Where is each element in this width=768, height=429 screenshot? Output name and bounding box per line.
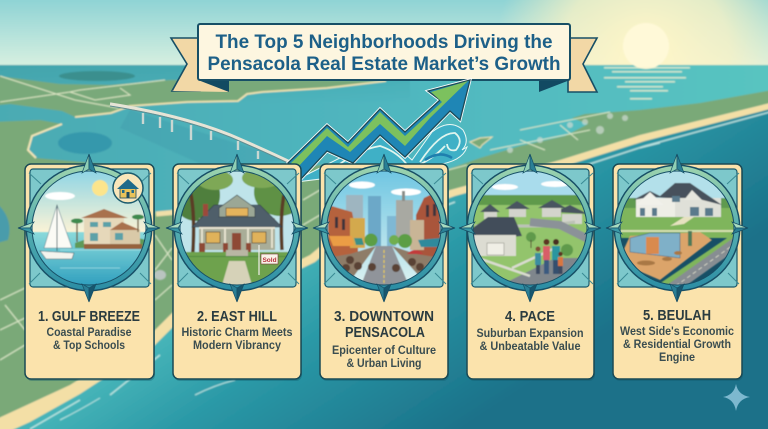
card 2 text (182, 309, 292, 352)
card 3 text: PENSACOLA (345, 325, 425, 341)
card 3: Downtown Pensacola (313, 154, 455, 381)
card 4 text: 4. PACE (505, 309, 555, 325)
card 4 text: Suburban Expansion (476, 328, 584, 340)
card 5 text: West Side's Economic (620, 326, 735, 338)
icon: school badge (113, 173, 143, 203)
ocean (0, 106, 768, 429)
icon: sparkle star (723, 384, 750, 411)
card 5 text: & Residential Growth (623, 339, 731, 351)
title banner (171, 24, 597, 92)
card 2: East Hill (166, 154, 308, 381)
card 1 text: Coastal Paradise (46, 327, 132, 339)
card 4 text: & Unbeatable Value (480, 341, 580, 353)
title plate (198, 24, 570, 80)
card 2 text: Modern Vibrancy (193, 340, 282, 352)
card 3 text: Epicenter of Culture (332, 345, 436, 357)
card 1 text: & Top Schools (53, 340, 125, 352)
family (535, 239, 563, 274)
bridge (110, 104, 292, 165)
card 4 text (476, 309, 584, 353)
sold sign text: Sold (262, 257, 277, 264)
illustration: sailboat and waterfront house (30, 170, 150, 288)
wave (296, 124, 467, 182)
card 5 text: Engine (659, 352, 695, 364)
title text: The Top 5 Neighborhoods Driving the (216, 31, 553, 53)
illustration: large house, commercial construction, highway (618, 170, 736, 290)
growth arrow with wave (288, 80, 470, 182)
card 3 text: 3. DOWNTOWN (334, 309, 434, 325)
title text: Pensacola Real Estate Market’s Growth (208, 53, 560, 75)
title text (208, 31, 560, 75)
left ribbon (171, 38, 229, 92)
card 4: Pace (459, 154, 601, 381)
illustration: downtown street (325, 170, 443, 288)
card 5 text: 5. BEULAH (643, 308, 711, 324)
illustration: suburban neighborhood with family (474, 172, 586, 284)
illustration: craftsman house with sold sign (180, 172, 294, 284)
card 2 text: 2. EAST HILL (197, 309, 277, 325)
card 1 text (38, 309, 140, 352)
card 5: Beulah (606, 154, 748, 381)
card 1: Gulf Breeze (18, 154, 160, 381)
card 1 text: 1. GULF BREEZE (38, 309, 140, 325)
sun (623, 23, 669, 69)
card 3 text: & Urban Living (346, 358, 422, 370)
card 3 text (332, 309, 436, 370)
card 5 text (620, 308, 735, 364)
card 2 text: Historic Charm Meets (182, 327, 292, 339)
right ribbon (539, 38, 597, 92)
main land mass (0, 89, 768, 422)
